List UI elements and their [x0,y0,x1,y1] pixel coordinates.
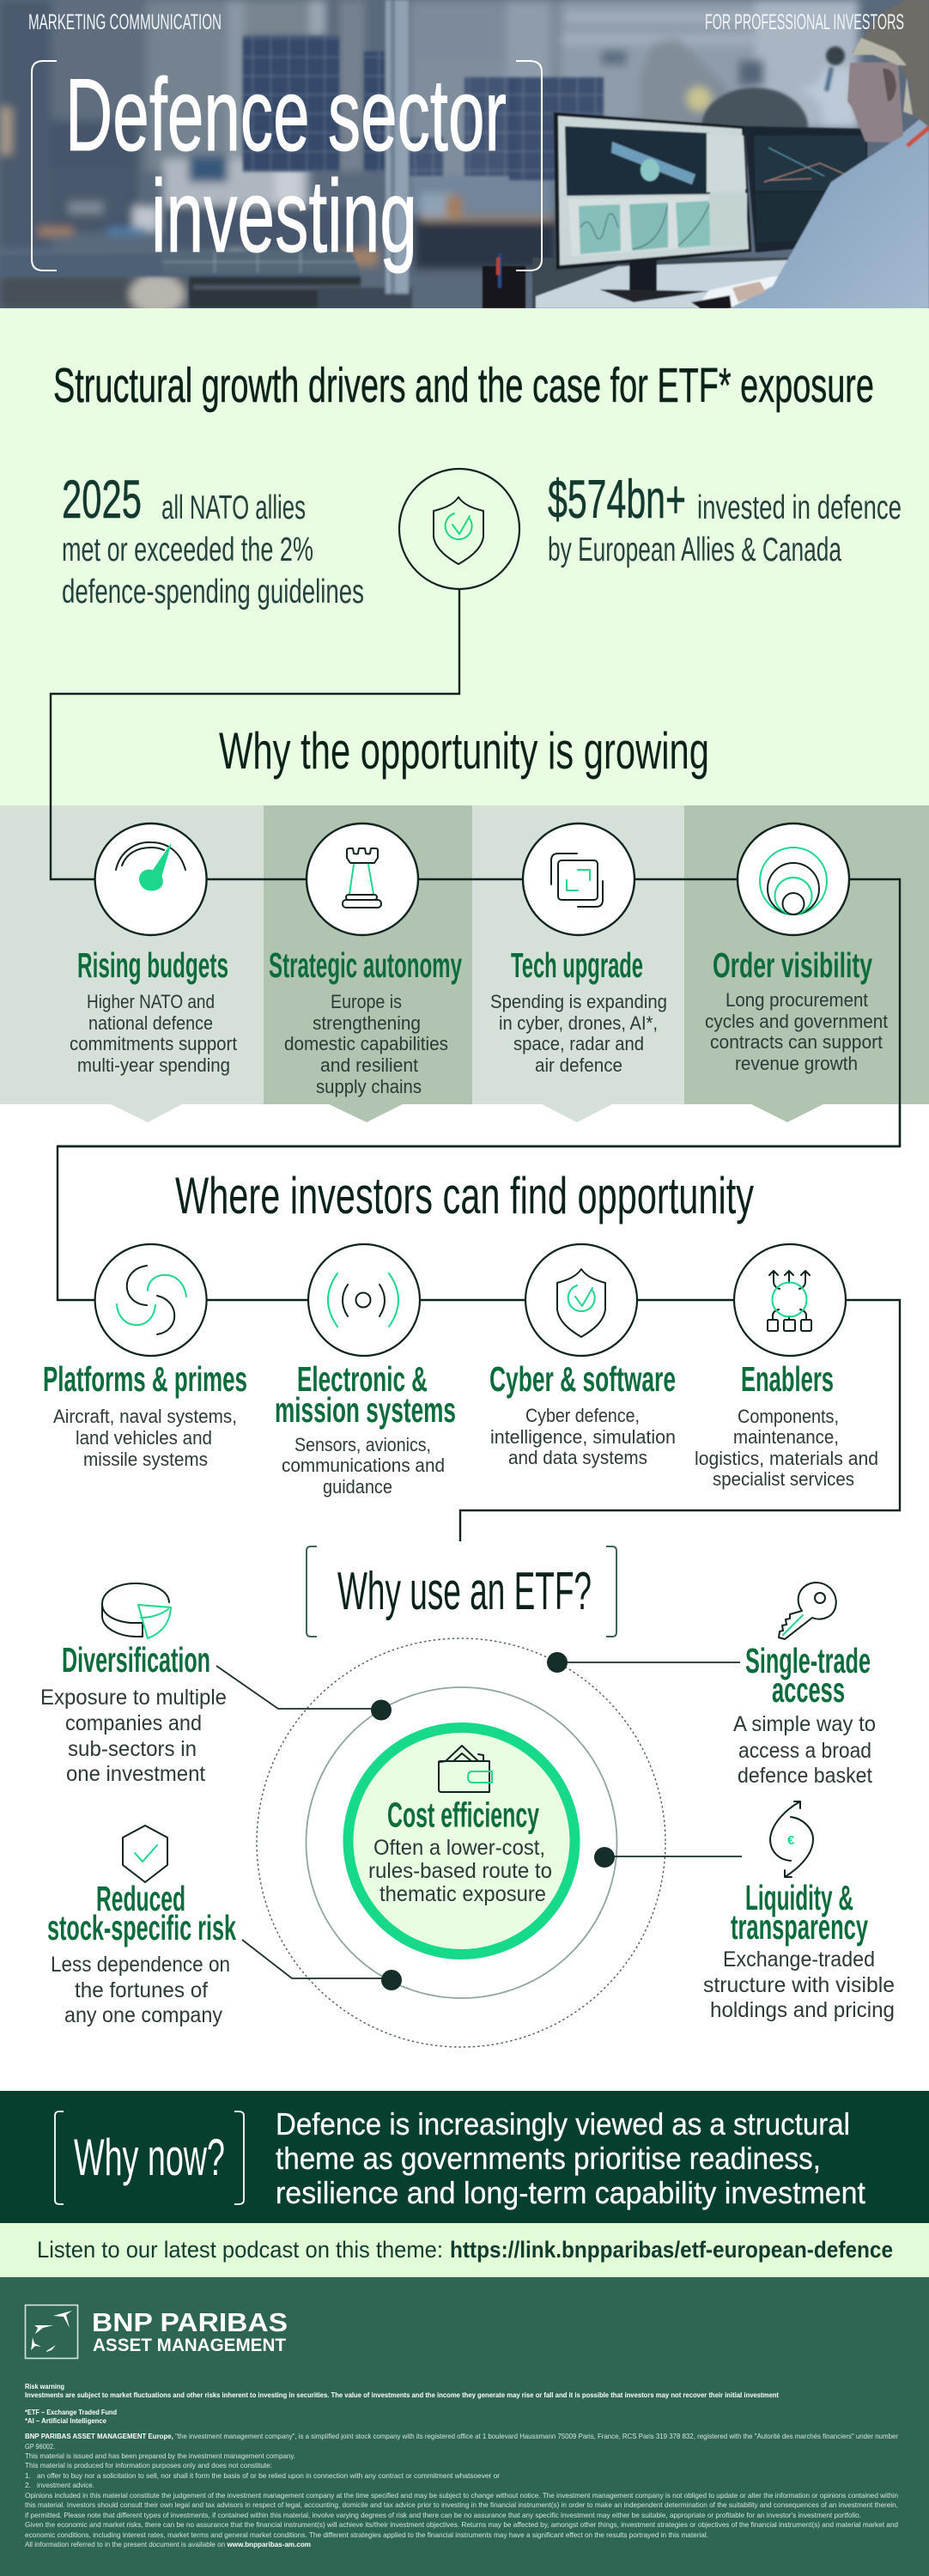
panel: footer [0,2277,929,2576]
logo: BNP Paribas Asset Management [26,2305,288,2358]
icon: exchange arrows with euro: € [787,1833,795,1848]
icon: network of arrows and boxes [768,1271,811,1331]
footnotes [25,2408,117,2425]
legal text: economic conditions, including interest rates, market terms and general market conditions. The different strategies applied to the financial instruments may have a significant effect on the results portrayed in this material. [25,2530,708,2539]
heading: why use an ETF with brackets [307,1546,616,1637]
card: tech upgrade: Spending is expanding [490,991,667,1012]
risk warning: Investments are subject to market fluctuations and other risks inherent to investing in securities. The value of investments and the income they generate may rise or fall and it is possible that investors may not recover their initial investment [25,2391,779,2399]
legal text: Given the economic and market risks, there can be no assurance that the financial instrument(s) will achieve its/their investment objectives. Returns may be affected by, amongst other things, investment strategies or objectives of the financial instrument(s) and material market and [25,2520,898,2529]
stat: 2025 NATO allies: all NATO allies [161,489,306,526]
card: tech upgrade [490,823,667,1076]
label: marketing communication: MARKETING COMMUNICATION [28,10,222,34]
stat: 2025 NATO allies: defence-spending guidelines [62,574,364,611]
panel: why now: Why now? [74,2129,225,2186]
benefit: reduced stock-specific risk [47,1826,236,2027]
connector over bands [51,805,900,1146]
legal text: This material is issued and has been prepared by the investment management company. [25,2451,295,2460]
benefit: reduced stock-specific risk: Reduced [96,1879,185,1918]
benefit: diversification: sub-sectors in [68,1737,197,1761]
benefit: reduced stock-specific risk: Less dependence on [51,1953,230,1977]
icon: nested circles [760,848,827,914]
card: rising budgets: multi-year spending [77,1054,230,1076]
card: enablers: specialist services [713,1468,854,1490]
title with brackets: investing [151,159,417,274]
card: strategic autonomy: Strategic autonomy [269,945,462,985]
legal text [25,2432,898,2549]
benefit: single-trade access: access a broad [738,1739,871,1763]
benefit: diversification: companies and [65,1711,202,1735]
legal text: investment advice. [37,2481,94,2489]
card: strategic autonomy: supply chains [316,1076,422,1097]
centre: cost efficiency: Cost efficiency [387,1795,539,1834]
card: rising budgets: Higher NATO and [87,991,215,1012]
benefit: single-trade access [733,1583,876,1788]
icon: key [779,1583,836,1639]
risk warning [25,2382,779,2399]
benefit: liquidity and transparency: holdings and pricing [710,1998,895,2022]
icon: gauge [116,842,185,890]
benefit: diversification: Exposure to multiple [40,1686,227,1710]
card: strategic autonomy: Europe is [331,991,402,1012]
icon: layered frames [551,854,603,907]
stat: 574bn invested: $574bn+ [548,470,686,530]
card: cyber and software: intelligence, simulation [490,1426,676,1448]
icon: chess rook [343,848,381,908]
diagram: concentric ETF rings [216,1638,742,2047]
card: enablers: maintenance, [733,1426,839,1448]
card: cyber and software: Cyber & software [489,1359,676,1399]
benefit: single-trade access: defence basket [738,1764,872,1788]
legal text: an offer to buy nor a solicitation to sell, nor shall it form the basis of or be relied upon in connection with any contract or commitment whatsoever or [37,2471,500,2480]
legal text: 2. [25,2481,31,2489]
card: tech upgrade: space, radar and [513,1033,644,1054]
icon: pie disc [102,1583,171,1638]
legal text: this material. Investors should consult their own legal and tax advisors in respect of legal, accounting, domicile and tax advice prior to investing in the financial instrument(s) in order to make an independent determination of the suitability and consequences of an investment therein, [25,2500,898,2509]
card: strategic autonomy: and resilient [320,1054,418,1076]
benefit: single-trade access: access [772,1670,845,1710]
title with brackets [32,58,542,274]
card: tech upgrade: in cyber, drones, AI*, [499,1012,658,1034]
panel: why now: resilience and long-term capability investment [276,2175,865,2210]
centre: cost efficiency: rules-based route to [368,1859,552,1883]
benefit: liquidity and transparency: Liquidity & [745,1878,853,1917]
logo: BNP Paribas Asset Management: ASSET MANAGEMENT [93,2336,286,2355]
card: tech upgrade: Tech upgrade [511,945,643,985]
card: enablers: Enablers [741,1359,834,1399]
legal text: 1. [25,2471,31,2480]
card: cyber and software: Cyber defence, [525,1405,640,1426]
benefit: liquidity and transparency: structure with visible [703,1973,895,1997]
icon: wallet [439,1746,492,1792]
card: tech upgrade: air defence [535,1054,622,1076]
icon: shield check outline [123,1826,167,1882]
card: rising budgets [70,823,237,1076]
benefit: single-trade access: A simple way to [733,1712,876,1736]
logo: BNP Paribas Asset Management: BNP PARIBAS [92,2307,288,2337]
card: strategic autonomy: strengthening [313,1012,421,1034]
benefit: reduced stock-specific risk: stock-specific risk [47,1908,236,1947]
benefit: diversification [40,1583,227,1786]
benefit: diversification: one investment [66,1762,205,1786]
panel: why now: Defence is increasingly viewed as a structural [276,2106,850,2142]
card: platforms and primes: missile systems [83,1449,208,1470]
footnotes: *AI – Artificial Intelligence [25,2416,106,2425]
card: enablers [695,1244,878,1490]
card: rising budgets: Rising budgets [77,945,228,985]
centre: cost efficiency [368,1746,552,1906]
legal text: if permitted. Please note that different types of investments, if contained within this material, involve varying degrees of risk and there can be no assurance that any specific investment may either be suitable, appropriate or profitable for an investor's investment portfolio. [25,2511,861,2519]
title with brackets: Defence sector [65,58,507,173]
card: platforms and primes [43,1244,247,1470]
benefit: reduced stock-specific risk: any one company [64,2003,222,2027]
stat: 574bn invested [548,470,902,568]
legal text: GP 96002. [25,2442,55,2451]
card: strategic autonomy: domestic capabilities [284,1033,448,1054]
card: order visibility: cycles and government [705,1011,888,1032]
centre: cost efficiency: Often a lower-cost, [373,1836,545,1860]
legal text: This material is produced for information purposes only and does not constitute: [25,2461,272,2470]
card: enablers: Components, [738,1406,839,1427]
card: platforms and primes: Platforms & primes [43,1359,247,1399]
centre: cost efficiency: thematic exposure [379,1882,546,1906]
hero photo: engineers at satellite control monitors [0,0,929,315]
card: electronic and mission systems: guidance [323,1476,392,1498]
stat: 2025 NATO allies [62,470,364,611]
panel: podcast banner: https://link.bnpparibas/etf-european-defence [450,2237,893,2263]
icon: spinning blades [117,1266,186,1334]
legal text: Opinions included in this material constitute the judgement of the investment management company at the time specified and may be subject to change without notice. The investment management company is not obliged to update or alter the information or opinions contained within [25,2491,898,2500]
benefit: liquidity and transparency [703,1801,895,2022]
icon: shield check [557,1269,605,1337]
card: electronic and mission systems: Electronic & [297,1359,428,1399]
benefit: reduced stock-specific risk: the fortunes of [75,1978,208,2002]
card: electronic and mission systems: Sensors, avionics, [294,1434,431,1455]
card: order visibility [705,823,888,1074]
panel: podcast banner [0,2223,929,2277]
card: platforms and primes: land vehicles and [76,1427,212,1449]
stat: 2025 NATO allies: met or exceeded the 2% [62,532,313,568]
hero header labels [28,10,904,34]
panel: why now [0,2091,929,2223]
risk warning: Risk warning [25,2382,64,2391]
card: electronic and mission systems: mission systems [275,1390,456,1430]
card: cyber and software: and data systems [508,1447,647,1468]
panel: structural growth background [0,308,929,805]
card: enablers: logistics, materials and [695,1448,878,1469]
panel: podcast banner: Listen to our latest podcast on this theme: [37,2237,443,2263]
legal text: BNP PARIBAS ASSET MANAGEMENT Europe, "the investment management company", is a simplified joint stock company with its registered office at 1 boulevard Haussmann 75009 Paris, France, RCS Paris 319 378 832, registered with the "Autorité des marchés financiers" under number [25,2432,898,2440]
benefit: liquidity and transparency: Exchange-traded [723,1947,875,1971]
heading: why the opportunity is growing: Why the opportunity is growing [219,722,709,780]
card: order visibility: contracts can support [710,1031,883,1053]
panel: opportunity bands [0,805,929,1122]
card: order visibility: Long procurement [726,989,868,1011]
icon: exchange arrows with euro [770,1801,813,1877]
icon: shield in circle [399,469,519,589]
card: electronic and mission systems [275,1244,456,1498]
stat: 2025 NATO allies: 2025 [62,470,142,530]
benefit: diversification: Diversification [62,1640,210,1680]
card: electronic and mission systems: communications and [282,1455,445,1476]
card: cyber and software [489,1244,676,1468]
card: rising budgets: national defence [88,1012,213,1034]
card: order visibility: revenue growth [735,1053,858,1074]
heading: why use an ETF with brackets: Why use an ETF? [337,1562,592,1621]
card: strategic autonomy [269,823,462,1097]
icon: signal [328,1273,398,1327]
legal text: All information referred to in the present document is available on www.bnpparibas-am.com [25,2540,311,2549]
card: platforms and primes: Aircraft, naval systems, [53,1406,237,1427]
card: rising budgets: commitments support [70,1033,237,1054]
connector line [51,589,900,1541]
footnotes: *ETF – Exchange Traded Fund [25,2408,117,2416]
panel: why now: theme as governments prioritise readiness, [276,2141,821,2176]
